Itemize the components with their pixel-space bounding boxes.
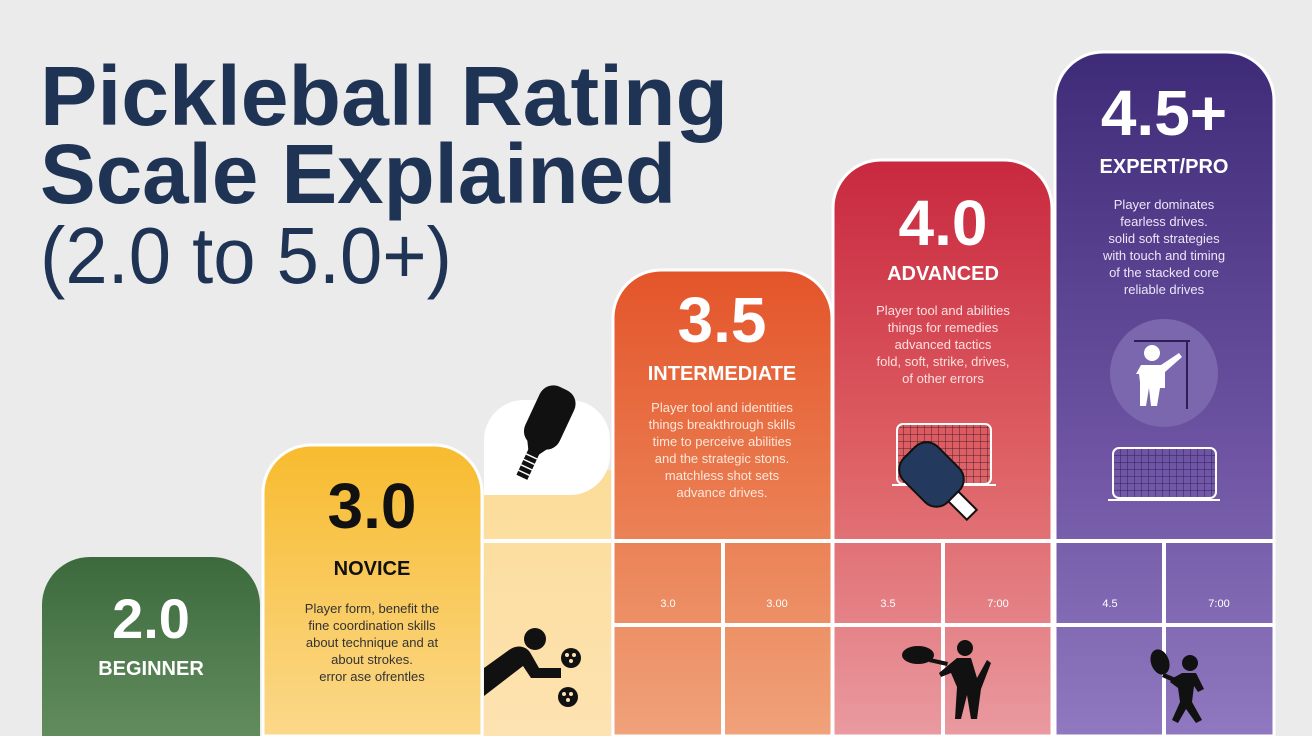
panel: intermediate 3.5: things breakthrough skills [649, 417, 796, 432]
panel: expert/pro 4.5+: with touch and timing [1102, 248, 1225, 263]
panel: expert/pro 4.5+: reliable drives [1124, 282, 1205, 297]
panel: expert/pro 4.5+: 4.5 [1102, 598, 1118, 610]
icon: player in circle [1110, 319, 1218, 427]
title: Scale Explained [40, 127, 676, 221]
panel: novice 3.0: 3.0 [328, 470, 416, 542]
icon: player with paddle [902, 640, 991, 719]
panel: expert/pro 4.5+ [1055, 52, 1274, 736]
panel: intermediate 3.5 [613, 270, 832, 736]
panel: advanced 4.0: of other errors [902, 371, 984, 386]
panel: light yellow column [484, 380, 611, 736]
panel: advanced 4.0: 7:00 [987, 598, 1009, 610]
panel: intermediate 3.5: and the strategic stons. [655, 451, 789, 466]
panel: novice 3.0: about strokes. [331, 652, 413, 667]
panel: intermediate 3.5: matchless shot sets [665, 468, 780, 483]
panel: advanced 4.0: Player tool and abilities [876, 303, 1010, 318]
title: (2.0 to 5.0+) [40, 211, 452, 300]
panel: advanced 4.0 [833, 160, 1052, 736]
panel: intermediate 3.5: 3.5 [678, 284, 766, 356]
panel: beginner 2.0: BEGINNER [98, 658, 204, 680]
panel: intermediate 3.5: Player tool and identities [651, 400, 793, 415]
panel: intermediate 3.5: advance drives. [676, 485, 768, 500]
panel: expert/pro 4.5+: of the stacked core [1109, 265, 1219, 280]
panel: expert/pro 4.5+: solid soft strategies [1108, 231, 1220, 246]
panel: novice 3.0: error ase ofrentles [319, 669, 425, 684]
panel: intermediate 3.5: time to perceive abilities [653, 434, 792, 449]
panel: novice 3.0: about technique and at [306, 635, 439, 650]
icon: net with paddle [892, 424, 996, 532]
panel: advanced 4.0: 3.5 [880, 598, 896, 610]
icon: paddle in white box [484, 380, 610, 495]
icon: net [1108, 448, 1220, 500]
panel: novice 3.0 [263, 445, 482, 736]
icon: player with balls [484, 628, 581, 707]
panel: intermediate 3.5: INTERMEDIATE [648, 363, 796, 385]
panel: novice 3.0: NOVICE [334, 558, 410, 580]
panel: expert/pro 4.5+: 4.5+ [1101, 77, 1227, 149]
panel: beginner 2.0: 2.0 [112, 587, 190, 650]
panel: novice 3.0: Player form, benefit the [305, 601, 439, 616]
panel: advanced 4.0: advanced tactics [895, 337, 992, 352]
panel: advanced 4.0: fold, soft, strike, drives, [877, 354, 1009, 369]
panel: expert/pro 4.5+: EXPERT/PRO [1100, 156, 1228, 178]
panel: intermediate 3.5: 3.0 [660, 598, 676, 610]
panel: novice 3.0: fine coordination skills [308, 618, 436, 633]
panel: beginner 2.0 [42, 557, 260, 736]
panel: expert/pro 4.5+: Player dominates [1114, 197, 1215, 212]
title [40, 49, 728, 300]
panel: advanced 4.0: ADVANCED [887, 263, 999, 285]
panel: expert/pro 4.5+: fearless drives. [1120, 214, 1208, 229]
panel: intermediate 3.5: 3.00 [766, 598, 788, 610]
panel: advanced 4.0: things for remedies [888, 320, 999, 335]
icon: player with paddle [1147, 647, 1204, 723]
title: Pickleball Rating [40, 49, 728, 143]
panel: expert/pro 4.5+: 7:00 [1208, 598, 1230, 610]
panel: advanced 4.0: 4.0 [899, 187, 987, 259]
